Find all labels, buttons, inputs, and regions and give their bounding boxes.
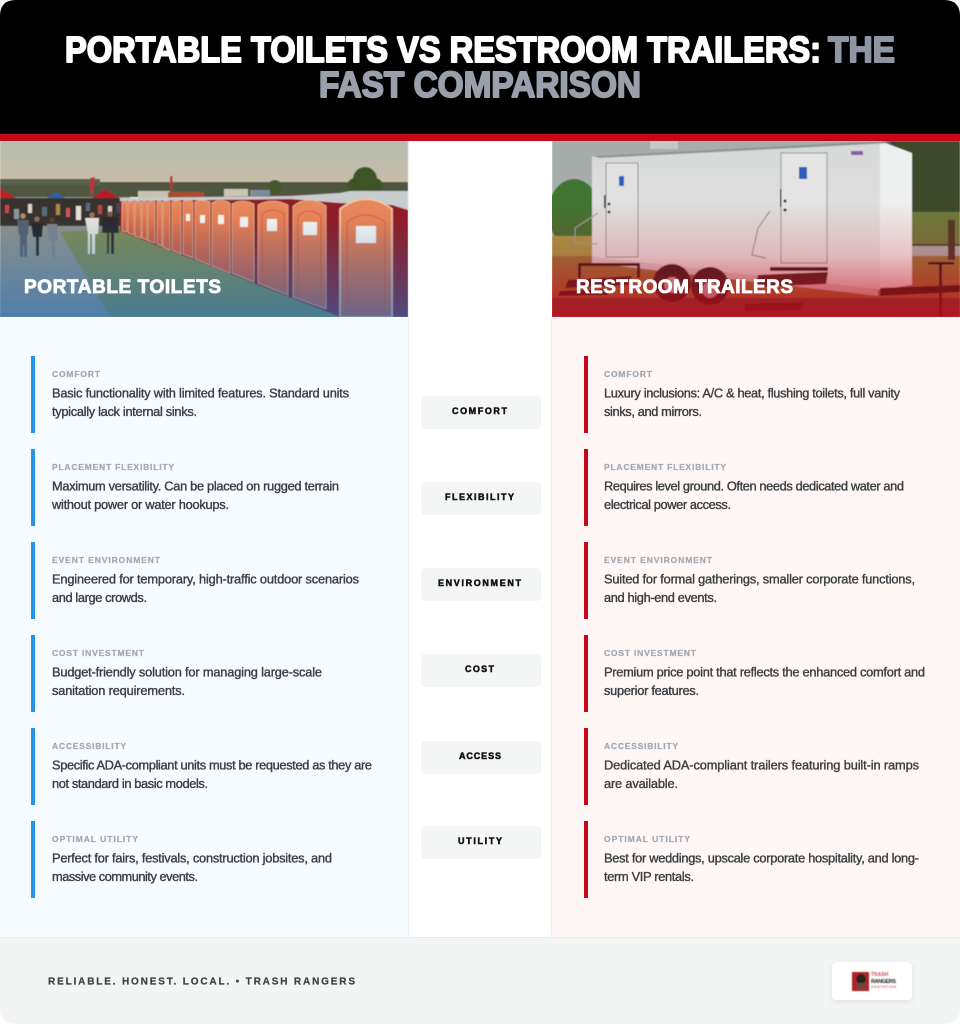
row: accessibility: not standard in basic models. xyxy=(52,776,208,791)
row: optimal utility xyxy=(584,821,919,898)
logo card xyxy=(832,962,912,1000)
row of toilets xyxy=(120,191,408,317)
row: optimal utility: Perfect for fairs, festivals, construction jobsites, and xyxy=(52,850,332,866)
photo: portable toilets xyxy=(0,141,408,317)
row: event environment: EVENT ENVIRONMENT xyxy=(604,555,713,565)
row: cost investment xyxy=(31,635,322,712)
pill: access xyxy=(421,741,541,774)
pill: utility: UTILITY xyxy=(458,836,502,846)
row: comfort: sinks, and mirrors. xyxy=(604,404,702,419)
label: restroom trailers: RESTROOM TRAILERS xyxy=(576,277,793,298)
pill: cost xyxy=(421,654,541,687)
title: FAST COMPARISON xyxy=(319,64,641,105)
footer tagline: RELIABLE. HONEST. LOCAL. • TRASH RANGERS xyxy=(48,976,355,988)
row: event environment: Engineered for temporary, high-traffic outdoor scenarios xyxy=(52,572,359,586)
row: optimal utility xyxy=(31,821,332,898)
photo: restroom trailer xyxy=(548,141,960,317)
row: optimal utility: massive community events. xyxy=(52,869,198,884)
row: placement flexibility xyxy=(31,449,339,526)
pill: flexibility: FLEXIBILITY xyxy=(445,492,514,502)
panel: center category pills xyxy=(421,396,541,859)
icon: trash rangers logo: RANGERS xyxy=(871,979,896,985)
row: placement flexibility: Requires level ground. Often needs dedicated water and xyxy=(604,478,904,494)
row: accessibility: are available. xyxy=(604,776,678,791)
row: cost investment xyxy=(584,635,925,712)
row: placement flexibility: PLACEMENT FLEXIBILITY xyxy=(604,462,726,472)
icon: trash rangers logo: TRASH xyxy=(871,972,889,978)
label: portable toilets: PORTABLE TOILETS xyxy=(24,277,221,298)
icon: trash rangers logo: SANITATION xyxy=(871,985,896,989)
row: optimal utility: OPTIMAL UTILITY xyxy=(52,834,138,844)
pill: utility xyxy=(421,826,541,859)
row: event environment xyxy=(584,542,915,619)
row: comfort: Luxury inclusions: A/C & heat, flushing toilets, full vanity xyxy=(604,386,901,400)
title xyxy=(66,36,895,98)
panel: portable toilets column xyxy=(31,356,372,898)
header band xyxy=(0,0,960,141)
row: cost investment: COST INVESTMENT xyxy=(604,648,697,658)
pill: access: ACCESS xyxy=(459,751,501,761)
row: event environment: and high-end events. xyxy=(604,590,717,605)
row: comfort xyxy=(31,356,349,433)
row: comfort: COMFORT xyxy=(52,369,101,379)
row: placement flexibility: PLACEMENT FLEXIBILITY xyxy=(52,462,174,472)
row: comfort xyxy=(584,356,901,433)
icon: trash rangers logo xyxy=(852,972,896,991)
panel backgrounds xyxy=(0,141,960,937)
row: placement flexibility: electrical power access. xyxy=(604,497,731,512)
row: event environment: and large crowds. xyxy=(52,590,147,605)
row: comfort: typically lack internal sinks. xyxy=(52,404,197,419)
pill: comfort: COMFORT xyxy=(452,406,508,416)
row: placement flexibility: Maximum versatility. Can be placed on rugged terrain xyxy=(52,478,339,494)
pill: environment xyxy=(421,568,541,601)
row: cost investment: superior features. xyxy=(604,683,699,698)
row: accessibility: Dedicated ADA-compliant trailers featuring built-in ramps xyxy=(604,758,919,772)
row: placement flexibility xyxy=(584,449,904,526)
row: event environment xyxy=(31,542,359,619)
row: cost investment: COST INVESTMENT xyxy=(52,648,145,658)
row: accessibility: ACCESSIBILITY xyxy=(604,741,678,751)
row: cost investment: Premium price point that reflects the enhanced comfort and xyxy=(604,664,925,680)
pill: environment: ENVIRONMENT xyxy=(438,578,522,588)
row: comfort: Basic functionality with limited features. Standard units xyxy=(52,386,349,400)
row: optimal utility: OPTIMAL UTILITY xyxy=(604,834,690,844)
row: event environment: EVENT ENVIRONMENT xyxy=(52,555,161,565)
row: accessibility: Specific ADA-compliant units must be requested as they are xyxy=(52,758,372,772)
row: comfort: COMFORT xyxy=(604,369,653,379)
pill: flexibility xyxy=(421,482,541,515)
row: placement flexibility: without power or water hookups. xyxy=(51,497,229,512)
pill: comfort xyxy=(421,396,541,429)
title: THE xyxy=(828,29,895,70)
row: event environment: Suited for formal gatherings, smaller corporate functions, xyxy=(604,572,915,586)
row: accessibility xyxy=(31,728,372,805)
title: PORTABLE TOILETS VS RESTROOM TRAILERS: xyxy=(65,29,821,70)
row: cost investment: sanitation requirements. xyxy=(52,683,185,698)
pill: cost: COST xyxy=(465,664,494,674)
crowd xyxy=(17,211,119,258)
row: cost investment: Budget-friendly solution for managing large-scale xyxy=(52,664,322,680)
row: optimal utility: Best for weddings, upscale corporate hospitality, and long- xyxy=(604,850,919,866)
panel: restroom trailers column xyxy=(584,356,925,898)
row: accessibility xyxy=(584,728,919,805)
row: accessibility: ACCESSIBILITY xyxy=(52,741,126,751)
row: optimal utility: term VIP rentals. xyxy=(604,869,694,884)
footer xyxy=(0,937,960,1024)
trailer xyxy=(558,141,960,317)
